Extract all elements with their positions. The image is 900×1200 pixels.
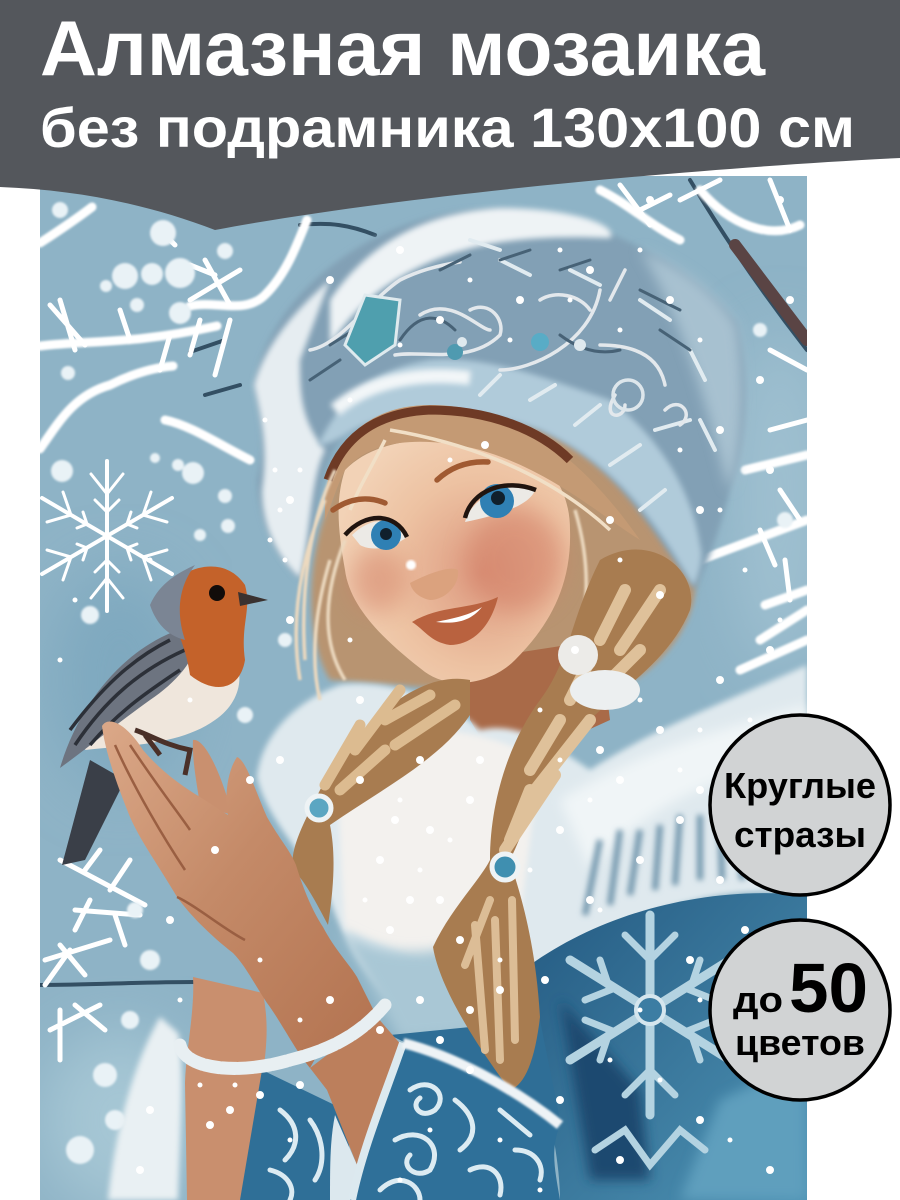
left braid bbox=[292, 679, 470, 925]
badge: up to 50 colours bbox=[710, 920, 890, 1100]
left eye bbox=[352, 521, 407, 548]
blurred bokeh snow bbox=[51, 202, 793, 1164]
subtitle: без подрамника 130х100 см bbox=[40, 96, 855, 159]
background snowflake bbox=[42, 461, 172, 611]
mouth bbox=[412, 597, 498, 645]
illustration: Snow Maiden with robin bbox=[40, 176, 830, 1200]
nose bbox=[410, 569, 458, 600]
hat top fur bbox=[330, 208, 611, 345]
loose hair strands bbox=[296, 470, 586, 700]
hat fur trim bbox=[318, 359, 701, 585]
coat snowflake bbox=[570, 915, 730, 1165]
fur texture bbox=[470, 240, 715, 510]
front forearm bbox=[310, 1017, 403, 1165]
face bbox=[325, 405, 640, 683]
right eye bbox=[465, 487, 535, 522]
coat bbox=[390, 893, 807, 1200]
badge: round rhinestones bbox=[710, 715, 890, 895]
tiara gem bbox=[345, 295, 400, 365]
badge: up to 50 colours: до bbox=[733, 979, 783, 1020]
falling snow bbox=[140, 200, 790, 1170]
left sleeve fur bbox=[108, 1017, 182, 1200]
sleeves bbox=[240, 1017, 560, 1200]
cheeks bbox=[467, 508, 563, 612]
badge: round rhinestones: стразы bbox=[734, 814, 866, 855]
loose hair behind head bbox=[311, 410, 695, 700]
bird: robin bbox=[60, 565, 268, 865]
snowy branches bbox=[40, 180, 807, 1060]
fringe bbox=[325, 405, 640, 540]
hat left white fur edge bbox=[254, 280, 330, 578]
badge: round rhinestones: Круглые bbox=[724, 765, 876, 806]
back forearm bbox=[185, 977, 267, 1200]
fur collar bbox=[257, 665, 807, 1040]
bracelet bbox=[180, 1005, 385, 1068]
neck bbox=[470, 646, 610, 736]
winter background bbox=[40, 176, 830, 1200]
badge: up to 50 colours: 50 bbox=[789, 949, 868, 1027]
hat: fur kokoshnik bbox=[254, 208, 745, 590]
tiara ornament bbox=[310, 250, 690, 425]
chest fur bbox=[339, 732, 533, 953]
brows bbox=[333, 462, 488, 510]
hat base bbox=[255, 210, 745, 590]
title: Алмазная мозаика bbox=[40, 4, 766, 92]
header banner bbox=[0, 0, 900, 230]
right braid bbox=[433, 550, 691, 1090]
hand bbox=[102, 721, 377, 1068]
back finger bbox=[193, 740, 232, 815]
badge: up to 50 colours: цветов bbox=[735, 1022, 865, 1063]
